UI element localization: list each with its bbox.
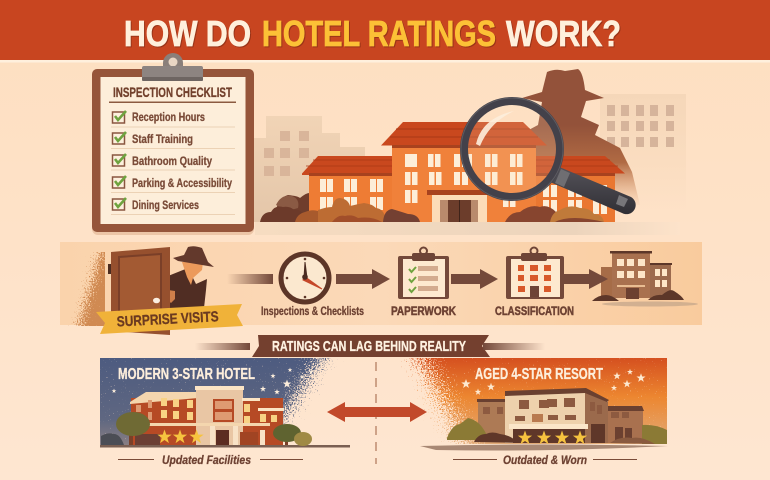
- surprise visits ribbon: SURPRISE VISITS: [116, 309, 219, 330]
- hotel inspection scene: [254, 69, 686, 235]
- arrow to clock: [227, 274, 273, 284]
- double arrow: [327, 402, 427, 422]
- caption: outdated and worn: Outdated & Worn: [503, 453, 587, 467]
- aged resort building: [477, 388, 644, 443]
- checklist item: dining services: [111, 198, 235, 215]
- checklist item: parking and accessibility: Parking & Accessibility: [132, 176, 232, 190]
- background city buildings left: [254, 116, 365, 222]
- caption: updated facilities: Updated Facilities: [162, 453, 251, 467]
- title banner: HOTEL RATINGS: [262, 13, 496, 54]
- magnifying glass: [461, 98, 636, 214]
- three rating stars: [157, 430, 204, 443]
- checklist item: parking and accessibility: [111, 176, 235, 193]
- arrow to paperwork: [336, 269, 390, 289]
- left wing: [309, 175, 393, 222]
- panel: modern 3-star hotel: [100, 358, 350, 467]
- arrow to classification: [451, 269, 498, 289]
- hotel building: [302, 122, 625, 222]
- checklist item: reception hours: Reception Hours: [132, 110, 205, 124]
- banner text: RATINGS CAN LAG BEHIND REALITY: [272, 339, 466, 355]
- spy silhouette: [500, 69, 640, 205]
- panel: inspection checklist clipboard: [92, 53, 254, 235]
- checklist item: bathroom quality: Bathroom Quality: [132, 154, 212, 168]
- four rating stars: [518, 430, 587, 444]
- checklist heading: INSPECTION CHECKLIST: [113, 84, 232, 100]
- checklist item: bathroom quality: [111, 154, 235, 170]
- arrow to rated hotel: [563, 269, 608, 289]
- checklist item: staff training: Staff Training: [132, 132, 193, 146]
- clock icon: [281, 254, 329, 302]
- checklist item: dining services: Dining Services: [132, 198, 199, 212]
- central block: [392, 145, 536, 222]
- label: classification: CLASSIFICATION: [495, 304, 574, 318]
- right wing: [536, 175, 615, 222]
- shrubs left: [260, 193, 420, 222]
- modern hotel building: [130, 386, 284, 445]
- title banner: [0, 0, 770, 62]
- navy sky background: [100, 358, 350, 446]
- door: [108, 247, 170, 335]
- modern hotel heading: MODERN 3-STAR HOTEL: [118, 366, 255, 383]
- panel: aged 4-star resort: [395, 358, 668, 467]
- background city buildings right: [600, 94, 686, 209]
- ground: [420, 444, 668, 450]
- shrubs right: [505, 206, 604, 222]
- banner right trail: [483, 343, 545, 350]
- orange sky background: [395, 358, 667, 444]
- title banner: HOW DO: [124, 13, 251, 54]
- entrance: [427, 190, 493, 222]
- windows: [320, 154, 607, 214]
- panel: inspection process band: [60, 242, 702, 335]
- checklist heading: [109, 84, 236, 103]
- shrubs: [447, 418, 667, 444]
- title banner: WORK?: [506, 13, 621, 54]
- trees: [101, 412, 312, 446]
- label: paperwork: PAPERWORK: [391, 304, 456, 318]
- aged resort heading: AGED 4-STAR RESORT: [475, 366, 603, 383]
- classification icon: [506, 248, 564, 299]
- rated hotel icon: [592, 251, 698, 306]
- ground strip: [255, 222, 680, 235]
- paperwork icon: [398, 248, 449, 299]
- checklist item: reception hours: [111, 110, 235, 128]
- label: inspections and checklists: Inspections & Checklists: [261, 306, 364, 318]
- banner left trail: [195, 343, 250, 350]
- clipboard clip: [142, 53, 203, 81]
- dusk stars: [461, 369, 646, 395]
- wall stain behind door: [65, 252, 105, 326]
- surprise visits ribbon: [96, 304, 243, 334]
- checklist item: staff training: [111, 132, 235, 149]
- center divider: [375, 362, 377, 464]
- night stars: [112, 368, 313, 394]
- ground: [100, 445, 350, 448]
- ratings lag banner: [195, 335, 545, 357]
- banner ribbon: [252, 335, 490, 357]
- spy figure behind door: [164, 246, 214, 308]
